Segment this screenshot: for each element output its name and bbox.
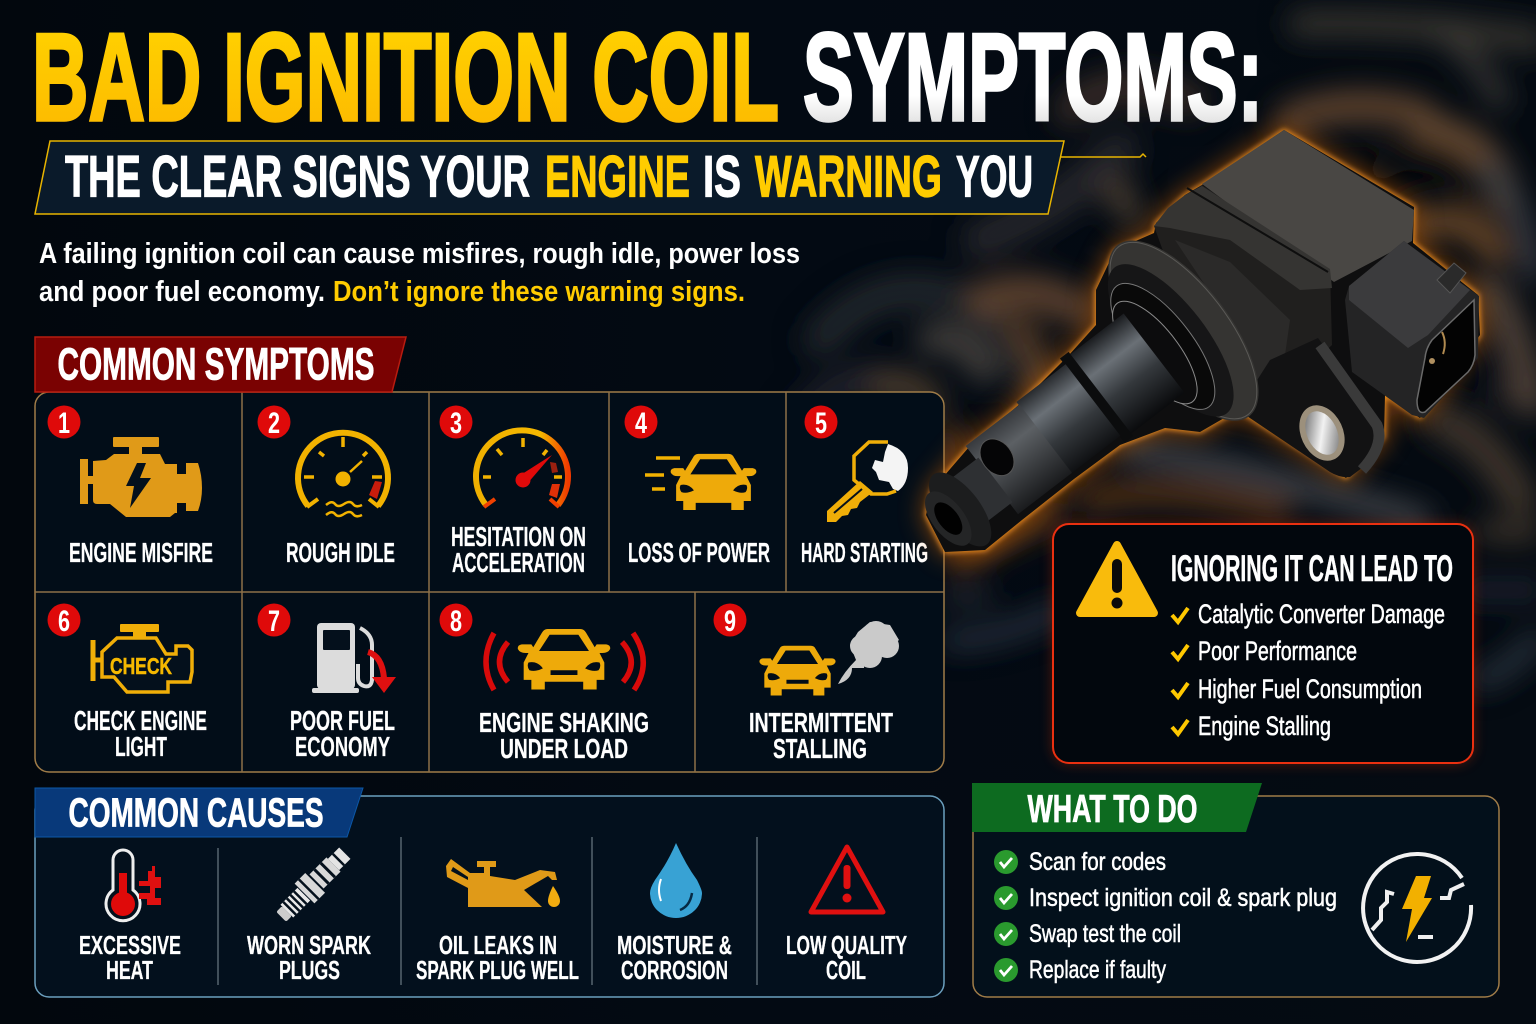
- heading: common symptoms: COMMON SYMPTOMS: [58, 338, 374, 390]
- list: actions: Scan for codes: [1029, 848, 1166, 876]
- symptom 8: engine shaking under load: [440, 604, 649, 764]
- symptom 2: rough idle: [258, 406, 395, 568]
- subtitle banner: ENGINE: [545, 144, 690, 210]
- symptom 5: hard starting: [801, 406, 928, 568]
- list: consequences: Engine Stalling: [1198, 711, 1331, 741]
- symptom 8: engine shaking under load: ENGINE SHAKING: [479, 707, 649, 738]
- label: worn spark plugs: PLUGS: [279, 955, 340, 985]
- intro paragraph: Don’t ignore these warning signs.: [333, 276, 745, 308]
- cause: excessive heat: [79, 850, 181, 985]
- list: consequences: Higher Fuel Consumption: [1198, 674, 1422, 704]
- symptom 4: loss of power: 4: [635, 407, 647, 440]
- symptom 3: hesitation on acceleration: HESITATION ON: [451, 521, 586, 552]
- subtitle banner: YOU: [956, 144, 1033, 210]
- cause: worn spark plugs: [271, 843, 355, 927]
- heading: what to do: [972, 783, 1262, 832]
- cause: low quality coil: [786, 847, 907, 985]
- coil: mounting ear with bolt hole: [1238, 338, 1383, 477]
- cause: moisture and corrosion: [617, 843, 732, 985]
- cause: oil leaks in spark plug well: SPARK PLUG WELL: [416, 955, 579, 985]
- symptom 3: hesitation on acceleration: 3: [450, 407, 462, 440]
- symptom 9: intermittent stalling: INTERMITTENT: [749, 707, 893, 738]
- symptom 2: rough idle: ROUGH IDLE: [286, 537, 395, 568]
- intro paragraph: [39, 238, 800, 308]
- symptom 9: intermittent stalling: [714, 604, 899, 764]
- cause: oil leaks in spark plug well: [416, 859, 579, 985]
- intro paragraph: and poor fuel economy.: [39, 276, 325, 308]
- list: actions: [994, 848, 1337, 984]
- panel: common symptoms: [35, 337, 944, 772]
- list: consequences: [1172, 599, 1445, 741]
- heading: what to do: WHAT TO DO: [1028, 788, 1198, 831]
- heading: common causes: [35, 788, 363, 837]
- cause: excessive heat: HEAT: [106, 955, 153, 985]
- symptom 3: hesitation on acceleration: ACCELERATION: [452, 547, 585, 578]
- list: consequences: Poor Performance: [1198, 636, 1357, 666]
- symptom 1: engine misfire: 1: [58, 407, 70, 440]
- cause: low quality coil: COIL: [826, 955, 866, 985]
- symptom 7: poor fuel economy: 7: [268, 605, 280, 638]
- symptom 1: engine misfire: ENGINE MISFIRE: [69, 537, 213, 568]
- heading: common causes: COMMON CAUSES: [68, 790, 324, 836]
- callout: ignoring it can lead to: [1053, 524, 1473, 763]
- cause: moisture and corrosion: MOISTURE &: [617, 930, 732, 960]
- list: consequences: Catalytic Converter Damage: [1198, 599, 1445, 629]
- symptom 6: check engine light: [48, 604, 207, 762]
- heading: common symptoms: [35, 337, 406, 392]
- list: actions: Swap test the coil: [1029, 920, 1181, 948]
- subtitle banner: WARNING: [755, 144, 942, 210]
- symptom 7: poor fuel economy: ECONOMY: [295, 731, 390, 762]
- subtitle banner: IS: [703, 144, 741, 210]
- label: worn spark plugs: [247, 930, 371, 985]
- list: actions: Inspect ignition coil & spark plug: [1029, 884, 1337, 912]
- symptom 8: engine shaking under load: UNDER LOAD: [500, 733, 628, 764]
- symptom 7: poor fuel economy: [258, 604, 396, 762]
- cause: moisture and corrosion: CORROSION: [621, 955, 728, 985]
- cause: low quality coil: LOW QUALITY: [786, 930, 907, 960]
- panel: common causes: [35, 788, 944, 997]
- symptom 1: engine misfire: [48, 406, 213, 568]
- symptom 6: check engine light: LIGHT: [115, 731, 167, 762]
- symptom 6: check engine light: 6: [58, 605, 70, 638]
- symptom 5: hard starting: HARD STARTING: [801, 537, 928, 568]
- intro paragraph: A failing ignition coil can cause misfires, rough idle, power loss: [39, 238, 800, 270]
- icon: spark in circle: [1363, 854, 1471, 962]
- photo: ignition coil with orange glow: [866, 130, 1480, 609]
- symptom 7: poor fuel economy: POOR FUEL: [290, 705, 395, 736]
- panel: what to do: [972, 783, 1499, 997]
- title: SYMPTOMS:: [803, 9, 1263, 147]
- symptom 9: intermittent stalling: STALLING: [773, 733, 867, 764]
- subtitle banner: [35, 141, 1146, 214]
- subtitle banner: THE CLEAR SIGNS YOUR: [65, 144, 530, 210]
- cause: excessive heat: EXCESSIVE: [79, 930, 181, 960]
- symptom 4: loss of power: LOSS OF POWER: [628, 537, 770, 568]
- symptom 4: loss of power: [624, 406, 770, 568]
- symptom 8: engine shaking under load: 8: [450, 605, 462, 638]
- cause: oil leaks in spark plug well: OIL LEAKS IN: [439, 930, 557, 960]
- symptom 2: rough idle: 2: [268, 407, 280, 440]
- symptom 5: hard starting: 5: [815, 407, 827, 440]
- coil: top housing: [1154, 130, 1414, 415]
- symptom 3: hesitation on acceleration: [440, 406, 586, 578]
- label: worn spark plugs: WORN SPARK: [247, 930, 371, 960]
- symptom 9: intermittent stalling: 9: [724, 605, 736, 638]
- title: BAD IGNITION COIL: [32, 9, 779, 147]
- symptom 6: check engine light: CHECK ENGINE: [74, 705, 207, 736]
- list: actions: Replace if faulty: [1029, 956, 1166, 984]
- icon: warning triangle: [1080, 545, 1154, 613]
- symptom 6: check engine light: CHECK: [110, 653, 172, 679]
- coil: electrical connector: [1345, 241, 1479, 418]
- coil: barrel and tip: [866, 217, 1286, 609]
